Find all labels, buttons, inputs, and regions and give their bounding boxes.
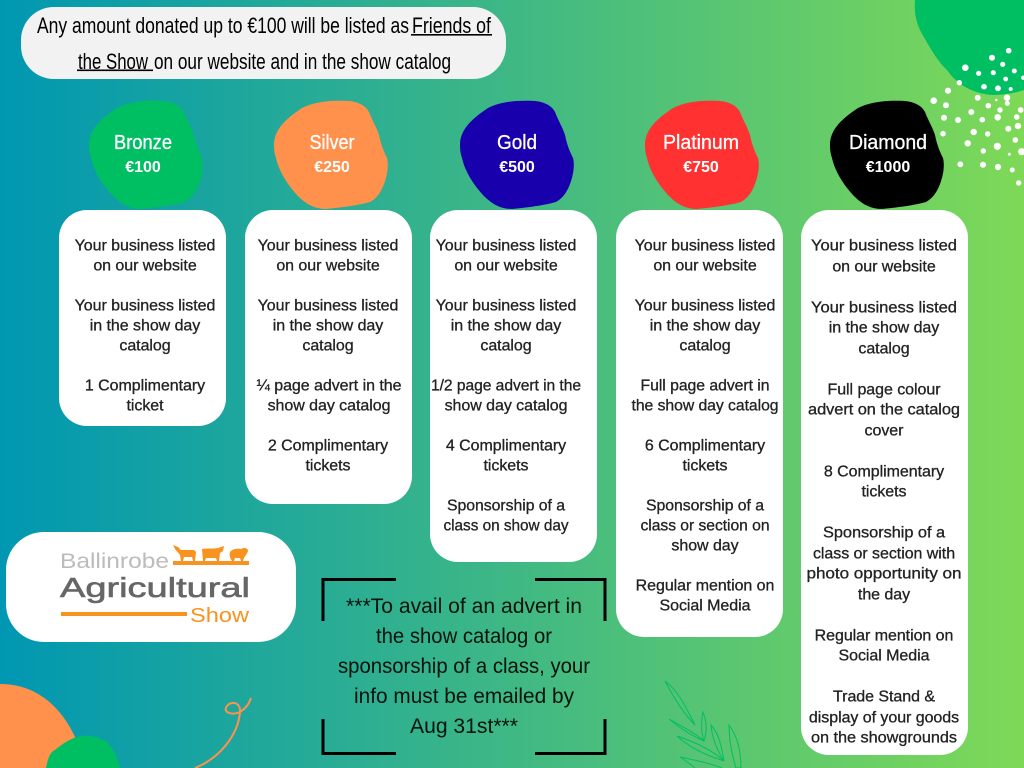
panel: Platinum benefits: 6 Complimentary [645,437,765,454]
panel: Diamond benefits: advert on the catalog [808,401,960,418]
panel: Diamond benefits: Your business listed [811,237,957,254]
panel: Diamond benefits: in the show day [829,319,939,336]
callout: advert deadline note: sponsorship of a class, your [338,655,590,678]
tier badge: Diamond [830,101,944,209]
panel: Bronze benefits: in the show day [90,317,200,334]
panel: Platinum benefits: Sponsorship of a [646,497,764,514]
panel: Silver benefits: Your business listed [258,297,398,314]
panel: Gold benefits: 4 Complimentary [446,437,566,454]
panel: Silver benefits: on our website [276,257,380,274]
panel: Silver benefits: 2 Complimentary [268,437,388,454]
panel: Platinum benefits: in the show day [650,317,760,334]
panel: Gold benefits: Your business listed [436,237,576,254]
logo icon: farm animals [173,545,248,561]
tier badge: Platinum: €750 [683,159,719,176]
panel: Silver benefits: Your business listed [258,237,398,254]
decoration: orange curl [195,698,251,768]
panel: Bronze benefits: ticket [126,397,164,414]
panel: Bronze benefits [59,210,226,426]
panel: Platinum benefits: show day [671,537,739,554]
panel: Platinum benefits: Full page advert in [640,377,770,394]
panel: Platinum benefits: Social Media [659,597,751,614]
panel: Diamond benefits: 8 Complimentary [824,463,944,480]
panel: Silver benefits: in the show day [273,317,383,334]
tier badge: Bronze: Bronze [114,132,172,154]
panel: Platinum benefits: catalog [679,337,731,354]
panel: Platinum benefits: the show day catalog [632,397,778,414]
panel: show logo [6,532,296,642]
panel: Diamond benefits: Regular mention on [815,627,953,644]
panel: Diamond benefits: photo opportunity on [806,565,962,582]
panel: Platinum benefits: Regular mention on [636,577,774,594]
panel: Bronze benefits: catalog [119,337,171,354]
panel: Diamond benefits: the day [858,586,910,603]
panel: Diamond benefits: tickets [862,483,907,500]
panel: Gold benefits [430,210,597,562]
panel: Diamond benefits: on our website [832,258,936,275]
panel: Platinum benefits: Your business listed [635,237,775,254]
panel: Gold benefits: class on show day [444,517,569,534]
tier badge: Gold: Gold [497,132,537,154]
panel: Platinum benefits: on our website [653,257,757,274]
tier badge: Diamond: €1000 [866,159,910,176]
tier badge: Platinum [645,101,759,209]
panel: Silver benefits: show day catalog [268,397,390,414]
panel: Diamond benefits: Your business listed [811,299,957,316]
decoration: top-right green blob [915,0,1024,95]
panel: Diamond benefits: catalog [858,340,910,357]
panel: Diamond benefits: Sponsorship of a [823,524,945,541]
tier badge: Gold: €500 [499,159,535,176]
logo wordmark: Agricultural: Agricultural [60,572,250,603]
panel: Diamond benefits: Trade Stand & [833,688,935,705]
panel: Diamond benefits: display of your goods [809,709,959,726]
callout: advert deadline note [323,580,605,754]
panel: Silver benefits [245,210,412,504]
banner underlined phrase end: the Show [78,49,148,74]
callout: advert deadline note: ***To avail of an advert in [346,595,582,618]
callout: advert deadline note: info must be emailed by [354,685,574,708]
panel: Gold benefits: on our website [454,257,558,274]
panel: Silver benefits: catalog [302,337,354,354]
banner line 2: on our website and in the show catalog [154,49,451,74]
panel: Bronze benefits: on our website [93,257,197,274]
tier badge: Platinum: Platinum [663,132,739,154]
panel: Diamond benefits: cover [865,422,904,439]
panel: Gold benefits: Sponsorship of a [447,497,565,514]
panel: Silver benefits: ¼ page advert in the [257,377,402,394]
panel: Bronze benefits: Your business listed [75,237,215,254]
panel: Diamond benefits [801,210,968,755]
panel: Gold benefits: catalog [480,337,532,354]
tier badge: Silver: Silver [310,132,355,154]
callout: advert deadline note: the show catalog or [376,625,552,648]
panel: Gold benefits: tickets [484,457,529,474]
panel: Silver benefits: tickets [306,457,351,474]
panel: Gold benefits: show day catalog [445,397,567,414]
tier badge: Bronze [89,101,203,209]
banner underlined phrase start: Friends of [412,13,492,38]
callout: friends of the show banner [21,7,506,79]
banner line 1: Any amount donated up to €100 will be listed as [37,13,409,38]
panel: Diamond benefits: Social Media [838,647,930,664]
decoration: bottom-left green blob [46,736,120,768]
panel: Gold benefits: in the show day [451,317,561,334]
tier badge: Silver [274,101,388,209]
corner brackets [323,580,605,754]
decoration: leaf outline [665,681,741,768]
panel: Gold benefits: 1/2 page advert in the [431,377,581,394]
panel: Platinum benefits: class or section on [640,517,770,534]
tier badge: Bronze: €100 [125,159,161,176]
decoration: bottom-left orange shape [0,684,75,768]
tier badge: Silver: €250 [314,159,350,176]
callout: advert deadline note: Aug 31st*** [410,715,518,738]
panel: Platinum benefits [616,210,783,637]
logo wordmark: Show: Show [190,605,250,627]
decoration: white dots [930,48,1024,186]
panel: Gold benefits: Your business listed [436,297,576,314]
panel: Diamond benefits: Full page colour [827,381,941,398]
tier badge: Diamond: Diamond [849,132,927,154]
logo wordmark: Ballinrobe: Ballinrobe [60,550,169,573]
tier badge: Gold [460,101,574,209]
panel: Diamond benefits: class or section with [813,545,955,562]
panel: Platinum benefits: tickets [682,457,728,474]
panel: Bronze benefits: Your business listed [75,297,215,314]
logo orange rules [61,561,249,616]
panel: Diamond benefits: on the showgrounds [811,729,957,746]
panel: Bronze benefits: 1 Complimentary [85,377,205,394]
panel: Platinum benefits: Your business listed [635,297,775,314]
